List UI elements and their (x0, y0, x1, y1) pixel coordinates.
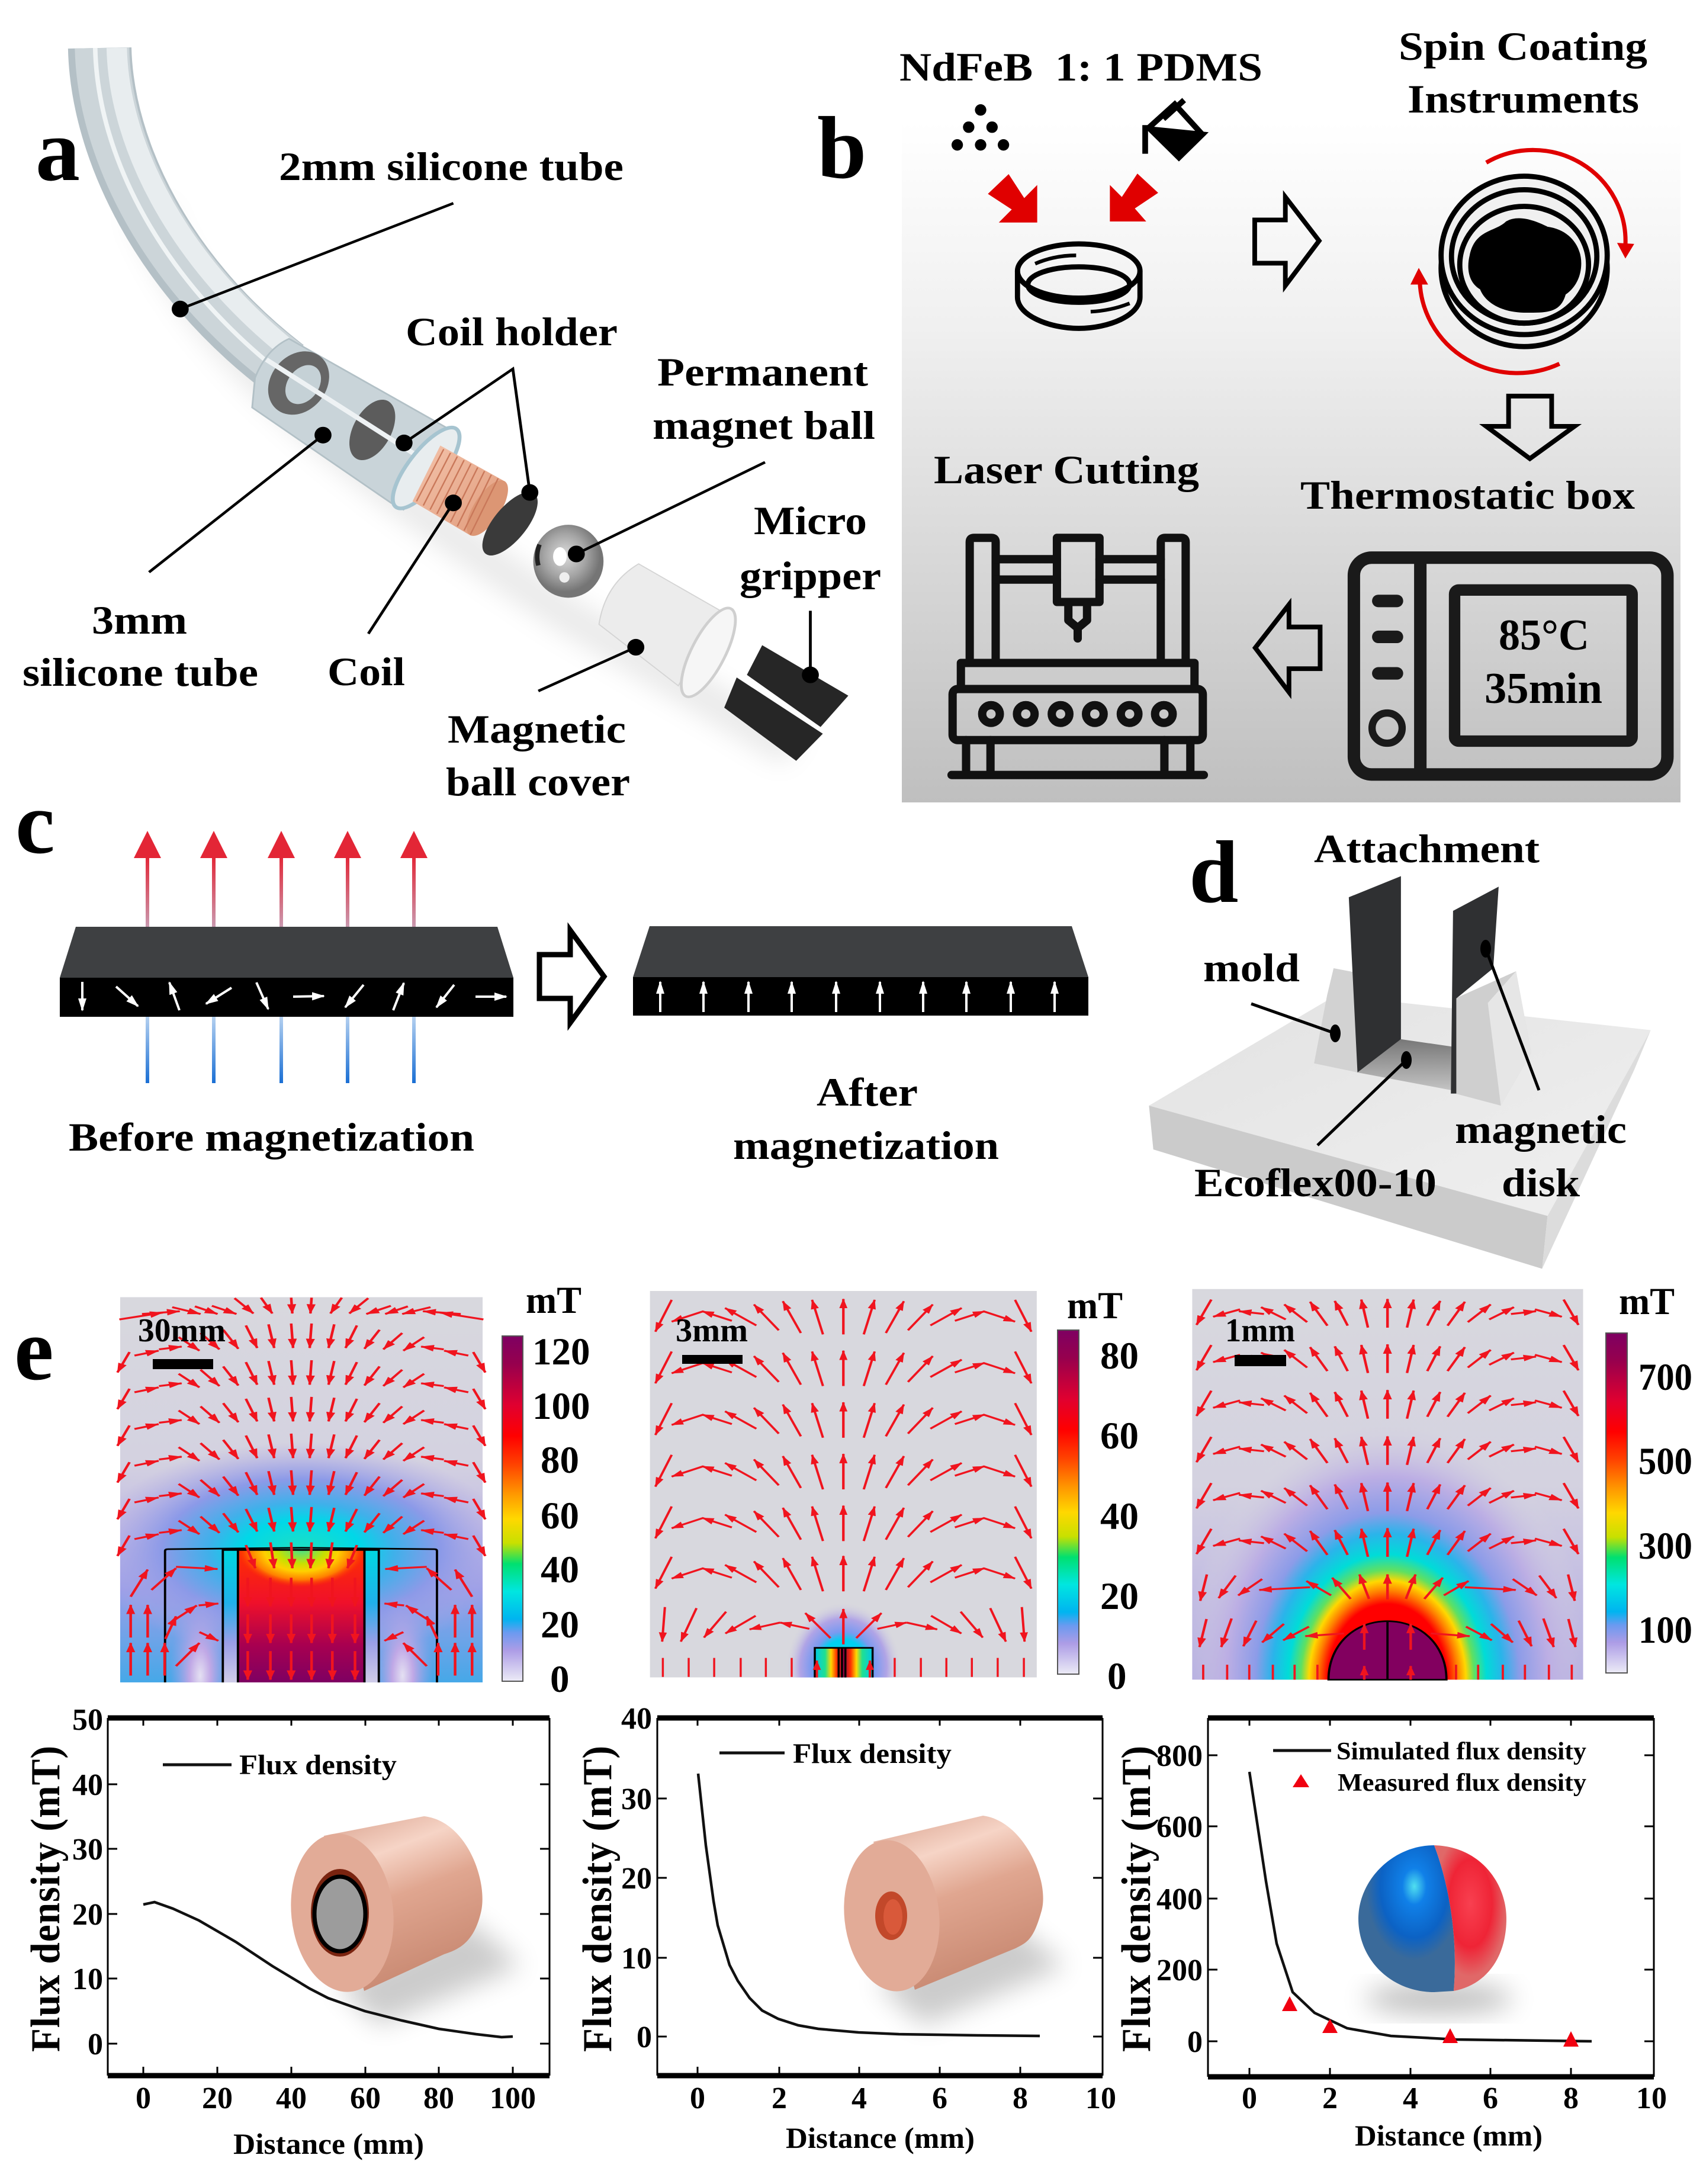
colour bar 2: 0 (1107, 1655, 1126, 1698)
label: oven settings (1484, 611, 1602, 713)
icon: coil (413, 445, 516, 541)
icon: 3mm silicone tube (252, 339, 471, 517)
x tick labels: 0 (136, 2082, 151, 2115)
icon: permanent magnet ball (534, 525, 603, 598)
label: 3mm silicone tube (23, 598, 258, 695)
arrow: before to after (539, 930, 604, 1023)
icon: magnetic ball cover (599, 564, 746, 703)
x tick labels: 20 (202, 2082, 233, 2115)
y tick labels: 800 (1156, 1739, 1203, 1773)
panel d: attachment mold (1149, 823, 1651, 1268)
colour bar 2: 40 (1100, 1495, 1139, 1538)
y axis title: Flux density (mT) (575, 1745, 621, 2052)
chart 3: flux density, magnet ball (1114, 1718, 1667, 2152)
chart 2: flux density, hollow coil (575, 1702, 1116, 2154)
right magnetic disk (1451, 887, 1499, 1094)
x tick labels: 40 (276, 2082, 307, 2115)
label: spin coating instruments: Instruments (1408, 76, 1639, 121)
left magnetic disk (1349, 876, 1401, 1072)
copper hollow coil render (837, 1816, 1066, 2025)
colour bar 2: 60 (1100, 1415, 1139, 1457)
leader dots (172, 301, 819, 683)
x tick labels: 60 (350, 2082, 381, 2115)
y tick labels: 10 (621, 1942, 652, 1976)
arrow: rotation red arcs (1410, 150, 1634, 373)
label: magnetic disk: magnetic (1455, 1107, 1627, 1152)
label: after magnetization (733, 1069, 999, 1168)
chart 1: flux density, coil with core (23, 1703, 550, 2160)
exploded device drawing (95, 48, 849, 761)
panel letter e: e (14, 1300, 54, 1399)
label: magnetic ball cover (446, 706, 630, 804)
icon: NdFeB powder dots (952, 104, 1009, 150)
y tick labels: 600 (1156, 1810, 1203, 1844)
colour bar 3: 700 (1638, 1356, 1692, 1399)
label: spin coating instruments: Spin Coating (1399, 24, 1647, 69)
y tick labels (1156, 1739, 1203, 2059)
x axis title: Distance (mm) (786, 2121, 975, 2154)
arrow: outline down (1486, 396, 1575, 458)
axes frame (1208, 1718, 1654, 2077)
colour bar 3 (1606, 1280, 1692, 1673)
label: spin coating instruments (1399, 24, 1647, 121)
colour bar 1: 120 (532, 1331, 590, 1373)
label: coil: Coil (327, 649, 405, 694)
magnetizing field blue lines (146, 1017, 416, 1083)
x axis title: Distance (mm) (233, 2127, 424, 2160)
arrow: outline right (1255, 197, 1319, 285)
label: 3mm silicone tube: 3mm (92, 598, 187, 643)
x tick labels: 8 (1563, 2082, 1579, 2115)
y tick labels: 0 (88, 2028, 103, 2061)
leader lines (149, 203, 811, 691)
icon: laser cutter (952, 538, 1204, 775)
x tick labels: 2 (1322, 2082, 1338, 2115)
y tick labels: 40 (72, 1768, 103, 1802)
y tick labels: 50 (72, 1703, 103, 1737)
colour bar 1 (502, 1279, 590, 1701)
leader dots (1330, 940, 1491, 1069)
x tick labels: 0 (690, 2082, 705, 2115)
colour bar 3: mT (1619, 1280, 1675, 1323)
field map 3: permanent magnet ball (1192, 1289, 1583, 1681)
panel c: magnetization (15, 774, 1088, 1168)
colour bar 2: 20 (1100, 1575, 1139, 1618)
bar after magnetization (633, 926, 1088, 1016)
label: oven settings: 85°C (1499, 611, 1589, 660)
magnet ball cross-section (1329, 1621, 1447, 1679)
x tick labels: 8 (1013, 2082, 1028, 2115)
scale bar 30mm (138, 1312, 226, 1369)
y tick labels: 10 (72, 1963, 103, 1996)
label: coil holder: Coil holder (406, 309, 618, 354)
label: micro gripper (740, 498, 881, 598)
x tick labels: 0 (1242, 2082, 1257, 2115)
label: magnetic disk (1455, 1107, 1627, 1205)
icon: 2mm silicone tube (95, 48, 295, 372)
label: magnetic ball cover: ball cover (446, 759, 630, 804)
axes frame (657, 1718, 1103, 2076)
colour bar 3: 300 (1638, 1525, 1692, 1568)
arrow: red left (988, 174, 1037, 223)
legend: Measured flux density (1338, 1769, 1586, 1797)
colour bar 1: mT (526, 1279, 581, 1322)
field colour background (120, 1297, 483, 1682)
label: permanent magnet ball: Permanent (657, 349, 868, 394)
bottom field lines (1203, 1665, 1572, 1679)
y tick labels: 30 (621, 1782, 652, 1816)
arrow field (656, 1299, 1032, 1678)
colour bar 1: 100 (532, 1385, 590, 1428)
panel a: exploded device view (23, 48, 881, 804)
colour bar 1: 40 (541, 1549, 579, 1591)
y tick labels: 30 (72, 1833, 103, 1867)
curve: flux density (698, 1774, 1040, 2036)
colour bar 1: 0 (550, 1658, 570, 1701)
label: after magnetization: After (817, 1069, 918, 1115)
label: Ecoflex00-10: Ecoflex00-10 (1194, 1160, 1437, 1205)
x axis title: Distance (mm) (1355, 2119, 1543, 2152)
arrow: outline left (1255, 605, 1320, 692)
icon: petri dish (1017, 244, 1140, 328)
panel e: field simulations and flux charts (14, 1279, 1692, 2160)
y tick labels: 0 (637, 2021, 652, 2054)
field colour background (650, 1291, 1037, 1678)
x tick labels: 4 (852, 2082, 867, 2115)
curve: flux density (143, 1902, 513, 2037)
icon: PDMS pouring bucket (1145, 100, 1202, 158)
legend (1273, 1738, 1586, 1797)
x tick labels (136, 2082, 536, 2115)
label: 2mm silicone tube: 2mm silicone tube (279, 144, 624, 189)
x tick labels (1242, 2082, 1667, 2115)
label: micro gripper: Micro (754, 498, 867, 543)
panel letter c: c (15, 774, 55, 872)
scale bar 1mm: 1mm (1225, 1312, 1295, 1349)
arrow field (1197, 1299, 1579, 1679)
scale bar 30mm: 30mm (138, 1312, 226, 1349)
label: attachment: Attachment (1314, 826, 1540, 871)
x tick labels: 100 (490, 2082, 536, 2115)
label: permanent magnet ball: magnet ball (653, 403, 875, 448)
x tick labels: 4 (1403, 2082, 1418, 2115)
scale bar 1mm (1225, 1312, 1295, 1366)
label: after magnetization: magnetization (733, 1123, 999, 1168)
magnetizing field red arrows (134, 831, 428, 927)
colour bar 3: 100 (1638, 1609, 1692, 1652)
arrow: red right (1110, 174, 1158, 221)
legend: Flux density (793, 1738, 952, 1769)
y tick labels: 200 (1156, 1954, 1203, 1987)
x tick labels: 6 (932, 2082, 947, 2115)
two-tone magnet sphere render (1358, 1845, 1513, 2014)
x tick labels: 10 (1085, 2082, 1116, 2115)
y tick labels (72, 1703, 103, 2061)
bottom field lines (663, 1658, 1024, 1677)
mold blocks (1314, 968, 1531, 1106)
panel b background (902, 121, 1680, 802)
field map 1: coil with core (116, 1297, 487, 1682)
x tick labels: 6 (1483, 2082, 1498, 2115)
label: before magnetization: Before magnetization (69, 1115, 474, 1160)
label: laser cutting: Laser Cutting (934, 447, 1199, 492)
label: permanent magnet ball (653, 349, 875, 448)
curve: simulated flux density (1249, 1772, 1592, 2041)
label: 3mm silicone tube: silicone tube (23, 650, 258, 695)
panel letter a: a (36, 101, 80, 200)
label: NdFeB 1:1 PDMS: NdFeB 1: 1 PDMS (899, 44, 1262, 89)
y tick labels: 40 (621, 1702, 652, 1736)
Ecoflex layer (1358, 1039, 1453, 1091)
y tick labels: 20 (621, 1862, 652, 1896)
x tick labels: 80 (423, 2082, 454, 2115)
mold drawing (1149, 876, 1651, 1268)
colour bar 1: 20 (541, 1604, 579, 1646)
y tick labels: 20 (72, 1898, 103, 1932)
y tick labels: 0 (1187, 2025, 1203, 2059)
icon: spin coater (1441, 176, 1607, 346)
colour bar 1: 60 (541, 1495, 579, 1537)
axes frame (108, 1718, 550, 2076)
measured points (1282, 1996, 1579, 2047)
colour bar 2 (1058, 1284, 1139, 1698)
object outline (815, 1648, 873, 1678)
label: oven settings: 35min (1484, 664, 1602, 713)
panel letter b: b (817, 99, 866, 197)
colour bar 3: 500 (1638, 1440, 1692, 1483)
icon: micro gripper (724, 645, 849, 761)
copper coil with core render (283, 1816, 521, 2025)
leader lines (1251, 949, 1539, 1145)
soft shadow (147, 208, 793, 750)
label: thermostatic box: Thermostatic box (1300, 473, 1635, 518)
icon: coil holder disk (473, 484, 548, 563)
label: magnetic disk: disk (1502, 1160, 1580, 1205)
x tick labels: 2 (772, 2082, 787, 2115)
coil and core outlines (165, 1548, 437, 1682)
x tick labels (690, 2082, 1116, 2115)
field map 2: hollow coil (650, 1291, 1037, 1678)
y tick labels: 400 (1156, 1883, 1203, 1916)
arrow field (117, 1297, 486, 1679)
mold base (1149, 995, 1651, 1268)
colour bar 1: 80 (541, 1439, 579, 1482)
y axis title: Flux density (mT) (1114, 1745, 1159, 2052)
field colour background (1192, 1289, 1583, 1679)
bar before magnetization (60, 927, 513, 1017)
x tick labels: 10 (1636, 2082, 1667, 2115)
y axis title: Flux density (mT) (23, 1745, 69, 2052)
process icons (952, 100, 1667, 775)
colour bar 2: 80 (1100, 1335, 1139, 1377)
label: mold: mold (1203, 945, 1300, 990)
label: micro gripper: gripper (740, 553, 881, 598)
y tick labels (621, 1702, 652, 2054)
panel b: fabrication process (817, 24, 1680, 802)
icon: thermostatic box (1354, 558, 1667, 775)
label: magnetic ball cover: Magnetic (448, 706, 626, 751)
legend: Simulated flux density (1336, 1738, 1586, 1765)
panel letter d: d (1189, 823, 1238, 921)
colour bar 2: mT (1067, 1284, 1123, 1327)
legend: Flux density (239, 1749, 397, 1781)
scale bar 3mm: 3mm (676, 1312, 748, 1349)
